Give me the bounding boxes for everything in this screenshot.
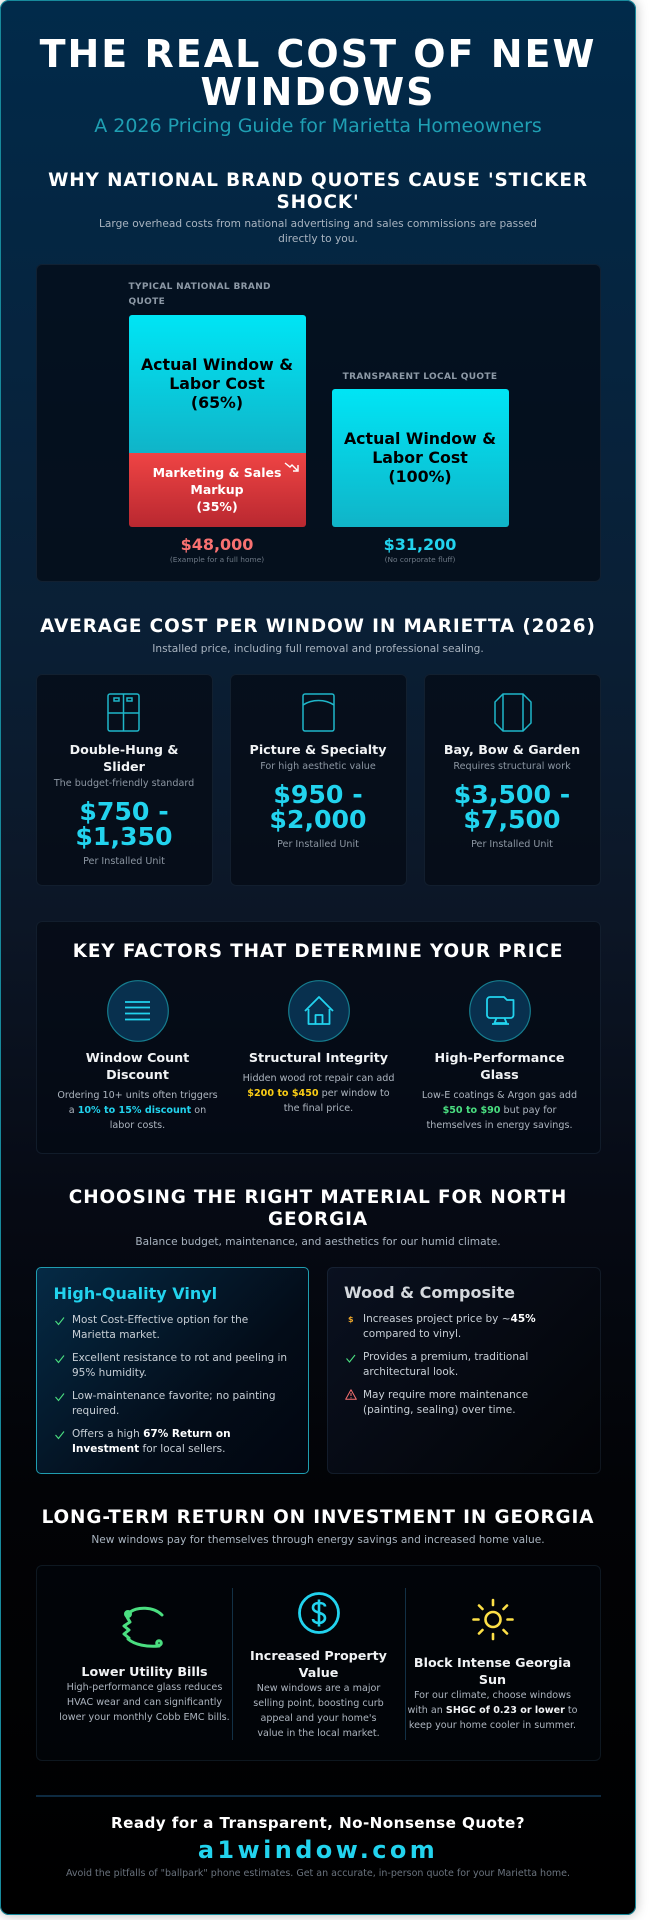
- title: THE REAL COST OF NEW: [40, 32, 596, 76]
- segment: actual cost 65%: [128, 315, 306, 453]
- label: national quote: [128, 282, 271, 307]
- heading: key factors: KEY FACTORS THAT DETERMINE YOUR PRICE: [73, 941, 563, 962]
- text: $200 to $450 per window to: [247, 1088, 390, 1099]
- text: HVAC wear and can significantly: [67, 1696, 222, 1708]
- icon: window count: [107, 980, 169, 1042]
- list item: architectural look.: [363, 1366, 458, 1378]
- list item: Provides a premium, traditional: [363, 1351, 528, 1363]
- unit: Per Installed Unit: [277, 839, 359, 850]
- list item: May require more maintenance: [363, 1389, 528, 1401]
- title: WINDOWS: [200, 70, 436, 114]
- list item: [72, 1428, 231, 1454]
- price: [454, 780, 570, 834]
- title: High-Performance: [435, 1050, 564, 1065]
- title: Bay, Bow & Garden: [444, 742, 580, 757]
- segment: markup 35%: [128, 453, 306, 527]
- list item: Offers a high 67% Return on: [72, 1428, 231, 1440]
- text: Ordering 10+ units often triggers: [57, 1090, 218, 1101]
- segment: markup 35%: Markup: [190, 482, 244, 497]
- icon: utility bills: [122, 1606, 164, 1648]
- footer rule: [36, 1795, 600, 1797]
- bar: local quote: (100%): [388, 467, 452, 486]
- unit: Per Installed Unit: [471, 839, 553, 850]
- segment: markup 35%: Marketing & Sales: [153, 465, 281, 480]
- panel: wood: [327, 1267, 600, 1474]
- website: a1window.com: [198, 1836, 438, 1864]
- text: labor costs.: [110, 1120, 165, 1131]
- heading: sticker shock: WHY NATIONAL BRAND QUOTES CAUSE 'STICKER: [48, 170, 588, 191]
- label: national quote: TYPICAL NATIONAL BRAND: [128, 282, 271, 292]
- text: lower your monthly Cobb EMC bills.: [59, 1712, 230, 1722]
- heading: return on investment: LONG-TERM RETURN ON INVESTMENT IN GEORGIA: [42, 1507, 594, 1528]
- text: $50 to $90 but pay for: [443, 1105, 556, 1116]
- icon: double-hung window: [107, 693, 140, 732]
- title: [435, 1050, 564, 1082]
- text: sticker shock intro: directly to you.: [278, 233, 358, 245]
- text: [422, 1090, 577, 1131]
- text: with an SHGC of 0.23 or lower to: [408, 1704, 578, 1716]
- icon: bay window: [494, 693, 532, 732]
- list item: [72, 1390, 276, 1416]
- title: Increased Property: [250, 1648, 387, 1663]
- bar: local quote: Labor Cost: [372, 448, 468, 467]
- call to action heading: Ready for a Transparent, No-Nonsense Quote?: [111, 1814, 525, 1832]
- heading: average cost: AVERAGE COST PER WINDOW IN MARIETTA (2026): [40, 616, 596, 637]
- text: Low-E coatings & Argon gas add: [422, 1090, 577, 1101]
- note: national price: (Example for a full home): [170, 555, 264, 564]
- heading: sticker shock: SHOCK': [276, 192, 360, 212]
- text: High-performance glass reduces: [67, 1682, 222, 1692]
- panel: quote comparison chart: [36, 264, 600, 582]
- icon: trending down: [284, 462, 299, 472]
- list item: Increases project price by ~45%: [363, 1313, 536, 1325]
- icons: check marks: [55, 1317, 64, 1440]
- heading: material: [69, 1187, 567, 1230]
- text: sticker shock intro: Large overhead costs from national advertising and sales commissions are passed: [99, 218, 537, 230]
- icon: high-performance glass: [469, 980, 531, 1042]
- icon: check: [346, 1354, 356, 1363]
- segment: actual cost 65%: Actual Window &: [141, 355, 293, 374]
- bar: local quote: Actual Window &: [344, 429, 496, 448]
- note: The budget-friendly standard: [54, 778, 194, 789]
- title: Block Intense Georgia: [414, 1655, 571, 1670]
- title: Double-Hung &: [70, 742, 178, 757]
- list item: Marietta market.: [72, 1328, 160, 1340]
- list item: compared to vinyl.: [363, 1328, 461, 1340]
- text: return intro: New windows pay for themselves through energy savings and increased home value.: [91, 1534, 545, 1546]
- text: material intro: Balance budget, maintenance, and aesthetics for our humid climate.: [135, 1236, 501, 1248]
- heading: sticker shock: [48, 170, 588, 212]
- heading: vinyl: High-Quality Vinyl: [54, 1284, 217, 1303]
- heading: material: CHOOSING THE RIGHT MATERIAL FOR NORTH: [69, 1187, 567, 1208]
- list item: Excellent resistance to rot and peeling in: [72, 1352, 287, 1364]
- title: Sun: [479, 1672, 506, 1687]
- price: $750 -: [79, 797, 169, 826]
- icon: picture window: [302, 693, 335, 732]
- text: a 10% to 15% discount on: [69, 1105, 206, 1116]
- note: local price: (No corporate fluff): [385, 555, 455, 564]
- text: Hidden wood rot repair can add: [243, 1073, 394, 1084]
- label: local quote: TRANSPARENT LOCAL QUOTE: [343, 372, 497, 382]
- text: [59, 1682, 230, 1722]
- segment: actual cost 65%: Labor Cost: [169, 374, 265, 393]
- icon: dollar coin: [298, 1592, 340, 1634]
- title: Window Count: [86, 1050, 189, 1065]
- list item: Most Cost-Effective option for the: [72, 1314, 248, 1326]
- panel: vinyl: [36, 1267, 309, 1474]
- text: average cost intro: Installed price, including full removal and professional sealing.: [152, 643, 484, 655]
- list item: [363, 1351, 528, 1378]
- divider: right: [404, 1588, 406, 1740]
- price: [75, 797, 173, 851]
- price: [269, 780, 367, 834]
- list item: [363, 1313, 536, 1340]
- text: the final price.: [284, 1103, 353, 1114]
- text: appeal and your home's: [260, 1712, 377, 1724]
- price: $3,500 -: [454, 780, 570, 809]
- list item: [363, 1389, 528, 1416]
- title: [86, 1050, 189, 1082]
- list item: required.: [72, 1404, 119, 1416]
- text: selling point, boosting curb: [253, 1698, 384, 1708]
- segment: markup 35%: (35%): [196, 499, 238, 514]
- list item: (painting, sealing) over time.: [363, 1404, 516, 1416]
- icon: sun: [472, 1598, 514, 1640]
- text: keep your home cooler in summer.: [409, 1720, 576, 1730]
- text: [253, 1682, 384, 1738]
- title: [414, 1655, 571, 1687]
- heading: material: GEORGIA: [268, 1208, 368, 1230]
- value: national price: $48,000: [181, 535, 253, 554]
- list item: Investment for local sellers.: [72, 1442, 225, 1454]
- segment: actual cost 65%: (65%): [191, 393, 243, 412]
- panel: key factors: [36, 921, 600, 1154]
- list item: Low-maintenance favorite; no painting: [72, 1390, 276, 1402]
- panel: picture price: [230, 674, 406, 886]
- title: Value: [299, 1665, 338, 1680]
- panel: bay price: [424, 674, 600, 886]
- title: Picture & Specialty: [250, 742, 386, 757]
- title: Discount: [106, 1067, 169, 1082]
- text: [57, 1090, 218, 1131]
- value: local price: $31,200: [384, 535, 456, 554]
- title: Glass: [480, 1067, 519, 1082]
- text: For our climate, choose windows: [414, 1690, 571, 1700]
- list item: [72, 1352, 287, 1378]
- title: Structural Integrity: [249, 1050, 388, 1065]
- text: [243, 1073, 394, 1114]
- text: [408, 1690, 578, 1730]
- text: New windows are a major: [257, 1682, 380, 1694]
- price: $950 -: [273, 780, 363, 809]
- panel: return on investment: [36, 1565, 600, 1761]
- fine print: Avoid the pitfalls of "ballpark" phone estimates. Get an accurate, in-person quote for your Marietta home.: [66, 1868, 570, 1879]
- bar: national quote: [129, 315, 306, 527]
- list item: 95% humidity.: [72, 1366, 147, 1378]
- title: [250, 1648, 387, 1680]
- panel: double-hung price: [36, 674, 212, 886]
- divider: left: [232, 1588, 233, 1740]
- price: $7,500: [463, 805, 561, 834]
- price: $2,000: [269, 805, 367, 834]
- title: [40, 32, 596, 114]
- icon: dollar: $: [348, 1315, 354, 1324]
- heading: wood: Wood & Composite: [344, 1283, 515, 1302]
- text: themselves in energy savings.: [426, 1120, 572, 1131]
- unit: Per Installed Unit: [83, 856, 165, 867]
- subtitle: A 2026 Pricing Guide for Marietta Homeowners: [94, 115, 542, 137]
- icon: warning: [345, 1389, 357, 1400]
- title: [70, 742, 178, 774]
- list item: [72, 1314, 248, 1340]
- bar: local quote: [332, 389, 508, 527]
- title: Lower Utility Bills: [81, 1664, 208, 1678]
- title: Slider: [103, 759, 145, 774]
- note: Requires structural work: [453, 761, 571, 772]
- text: sticker shock intro: [99, 218, 537, 245]
- price: $1,350: [75, 822, 173, 851]
- note: For high aesthetic value: [260, 761, 376, 772]
- label: national quote: QUOTE: [128, 297, 165, 307]
- text: value in the local market.: [257, 1728, 380, 1738]
- icon: structural house: [288, 980, 350, 1042]
